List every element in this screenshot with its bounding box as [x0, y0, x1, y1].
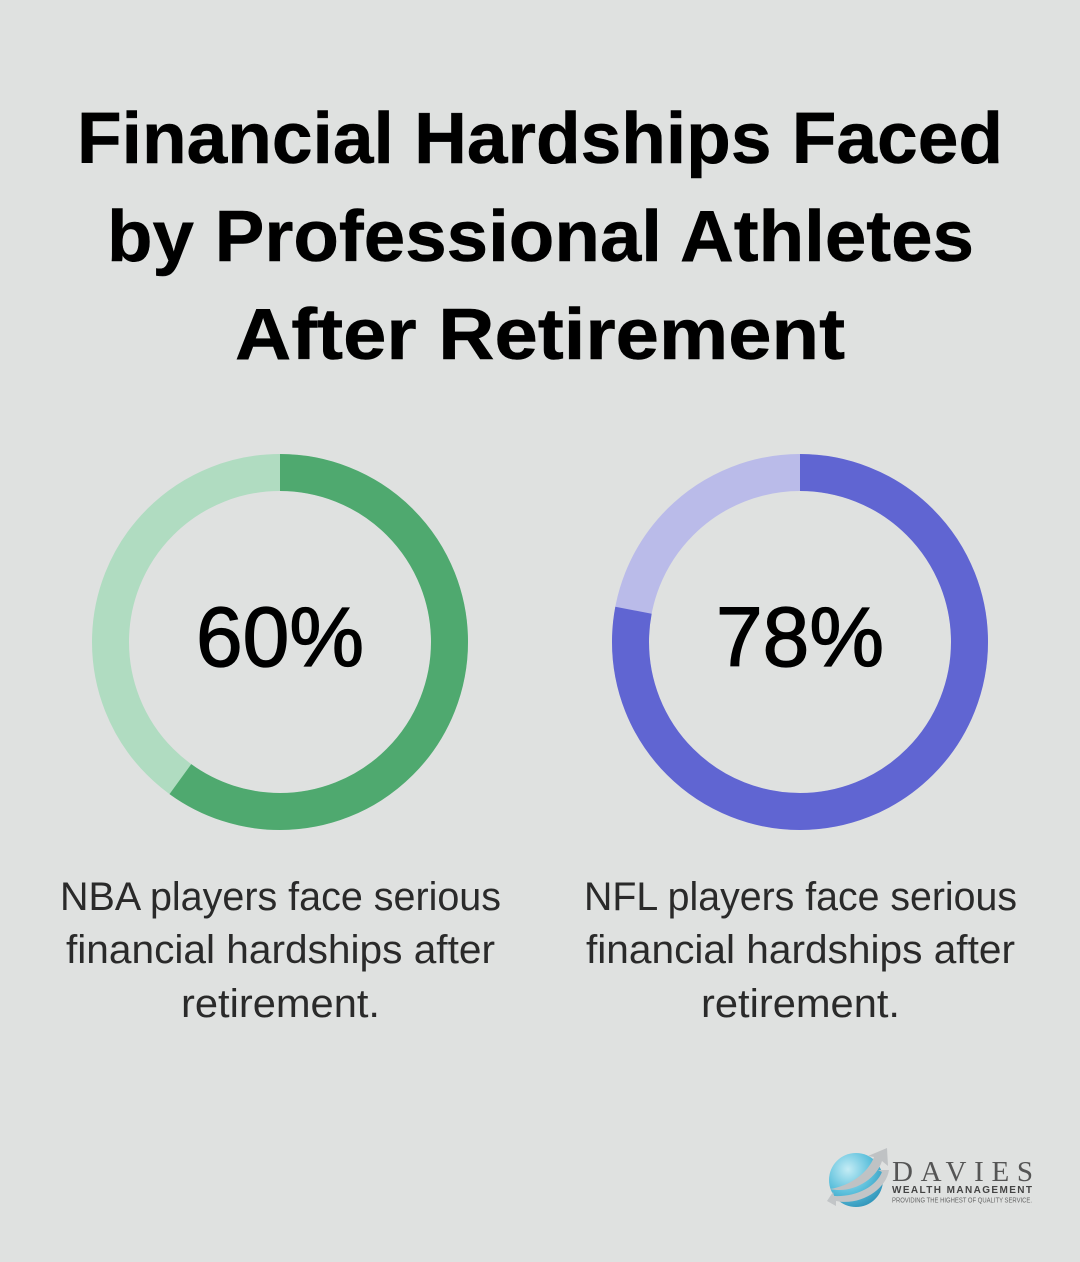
- logo: Davies Wealth Management: [827, 1148, 1033, 1207]
- value: 60%: 60%: [196, 590, 364, 684]
- description: NBA: NBA players face serious: [60, 875, 501, 919]
- description: NFL: retirement.: [701, 982, 900, 1026]
- donut chart: NBA 60%: [110, 472, 450, 812]
- title: [77, 99, 1003, 375]
- description: NBA: retirement.: [181, 982, 380, 1026]
- description: NFL: [584, 875, 1017, 1026]
- panel: NBA statistic: [60, 472, 501, 1026]
- icon: globe with arrows: [827, 1148, 889, 1207]
- title: After Retirement: [235, 295, 845, 375]
- title: Financial Hardships Faced: [77, 99, 1003, 179]
- value: 78%: 78%: [716, 590, 884, 684]
- wordmark: WEALTH MANAGEMENT: WEALTH MANAGEMENT: [892, 1185, 1032, 1196]
- tagline: PROVIDING THE HIGHEST OF QUALITY SERVICE.: [892, 1198, 1032, 1204]
- description: NFL: NFL players face serious: [584, 875, 1017, 919]
- wordmark: DAVIES: DAVIES: [892, 1156, 1033, 1188]
- description: NBA: financial hardships after: [66, 928, 495, 972]
- description: NFL: financial hardships after: [586, 928, 1015, 972]
- description: NBA: [60, 875, 501, 1026]
- title: by Professional Athletes: [107, 197, 974, 277]
- donut chart: NFL 78%: [630, 472, 970, 812]
- panel: NFL statistic: [584, 472, 1017, 1026]
